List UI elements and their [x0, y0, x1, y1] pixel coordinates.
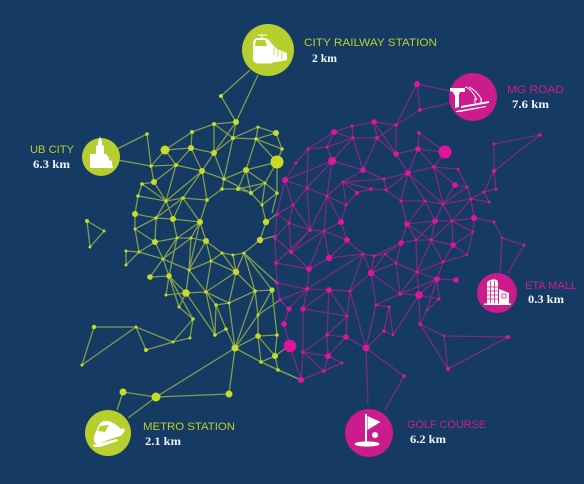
label: metro station: METRO STATION — [143, 421, 235, 433]
distance: 6.2 km: 6.2 km — [410, 434, 446, 446]
icon: city railway train — [242, 24, 294, 76]
distance: 2 km: 2 km — [312, 53, 337, 65]
distance: 0.3 km: 0.3 km — [528, 294, 564, 306]
label: golf course: GOLF COURSE — [407, 419, 486, 431]
label: eta mall: ETA MALL — [525, 280, 577, 292]
icon: ub city tower — [82, 136, 120, 176]
ub city callout — [30, 136, 120, 176]
label: city railway station: CITY RAILWAY STATION — [304, 37, 437, 49]
golf course callout — [345, 409, 486, 457]
green network — [80, 70, 301, 418]
magenta network — [274, 81, 542, 410]
icon: mg road flyover — [449, 73, 497, 121]
metro station callout — [85, 410, 235, 456]
icon: metro train — [85, 410, 131, 456]
mg road callout — [449, 73, 564, 121]
label: ub city: UB CITY — [30, 144, 75, 156]
city railway station callout — [242, 24, 437, 76]
icon: golf flag — [345, 409, 393, 457]
icon: eta mall building — [477, 273, 517, 313]
eta mall callout — [477, 273, 577, 313]
label: mg road: MG ROAD — [507, 84, 564, 96]
distance: 6.3 km: 6.3 km — [33, 159, 70, 171]
distance: 7.6 km: 7.6 km — [512, 99, 549, 111]
distance: 2.1 km: 2.1 km — [145, 436, 181, 448]
